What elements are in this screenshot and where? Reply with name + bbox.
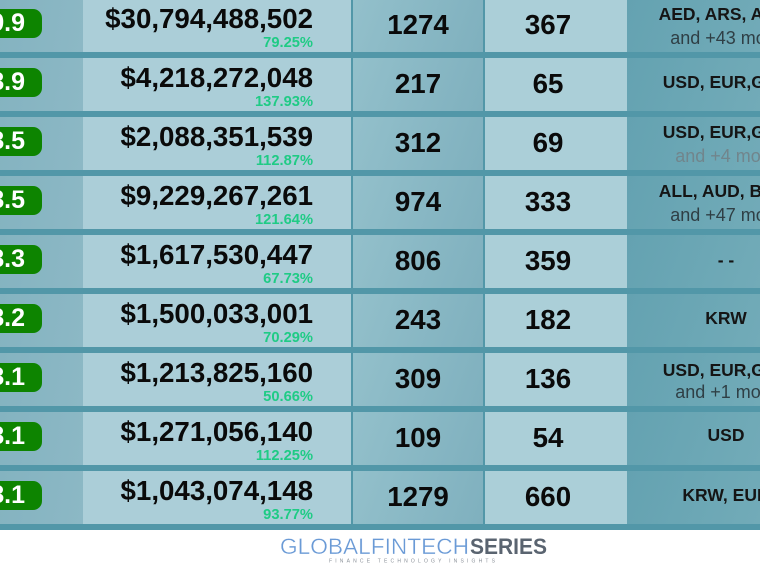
row 3: $2,088,351,539 <box>121 121 313 152</box>
row 7: 309 <box>395 363 441 394</box>
row 8: 112.25% <box>256 448 313 464</box>
row 8: 54 <box>533 422 563 453</box>
row 8: USD <box>708 425 744 445</box>
row 4: 121.64% <box>255 212 313 228</box>
logo wordmark <box>280 534 547 559</box>
row 9: 1279 <box>387 481 449 512</box>
row 7 <box>0 353 760 406</box>
row 1 <box>0 0 760 52</box>
row 6 <box>0 294 760 347</box>
row 7: 136 <box>525 363 571 394</box>
logo tagline: FINANCE TECHNOLOGY INSIGHTS <box>329 558 496 564</box>
row 8: 109 <box>395 422 441 453</box>
row 1: 1274 <box>387 9 449 40</box>
row 7: 50.66% <box>263 389 313 405</box>
row 3 <box>0 117 760 170</box>
row 3: 112.87% <box>256 153 313 169</box>
row 9: $1,043,074,148 <box>121 475 313 506</box>
row 6: 182 <box>525 304 571 335</box>
logo: Global Fintech Series <box>280 534 547 564</box>
row 2: $4,218,272,048 <box>121 62 313 93</box>
row 2: 137.93% <box>255 94 313 110</box>
row 1: $30,794,488,502 <box>105 3 313 34</box>
row 2 <box>0 58 760 111</box>
row 5: 67.73% <box>263 271 313 287</box>
row 4: $9,229,267,261 <box>121 180 313 211</box>
row 6: $1,500,033,001 <box>121 298 313 329</box>
row 2: 65 <box>533 68 563 99</box>
row 5: $1,617,530,447 <box>121 239 313 270</box>
row 5: 359 <box>525 245 571 276</box>
row 4 <box>0 176 760 229</box>
row 9 <box>0 471 760 524</box>
row 5: - - <box>718 250 734 270</box>
row 9: 660 <box>525 481 571 512</box>
row 6: 243 <box>395 304 441 335</box>
row 3: 312 <box>395 127 441 158</box>
logo wordmark: GLOBALFINTECH <box>280 534 469 559</box>
logo wordmark: SERIES <box>470 534 547 559</box>
row 3: 69 <box>533 127 563 158</box>
row 7: $1,213,825,160 <box>121 357 313 388</box>
row 8: $1,271,056,140 <box>121 416 313 447</box>
row 6: 70.29% <box>263 330 313 346</box>
row 2: 217 <box>395 68 441 99</box>
row 1: 79.25% <box>263 35 313 51</box>
row 6: KRW <box>705 308 747 328</box>
row 5: 806 <box>395 245 441 276</box>
row 1: 367 <box>525 9 571 40</box>
row 5 <box>0 235 760 288</box>
row 8 <box>0 412 760 465</box>
row 4: 974 <box>395 186 441 217</box>
row 4: 333 <box>525 186 571 217</box>
row 9: 93.77% <box>263 507 313 523</box>
